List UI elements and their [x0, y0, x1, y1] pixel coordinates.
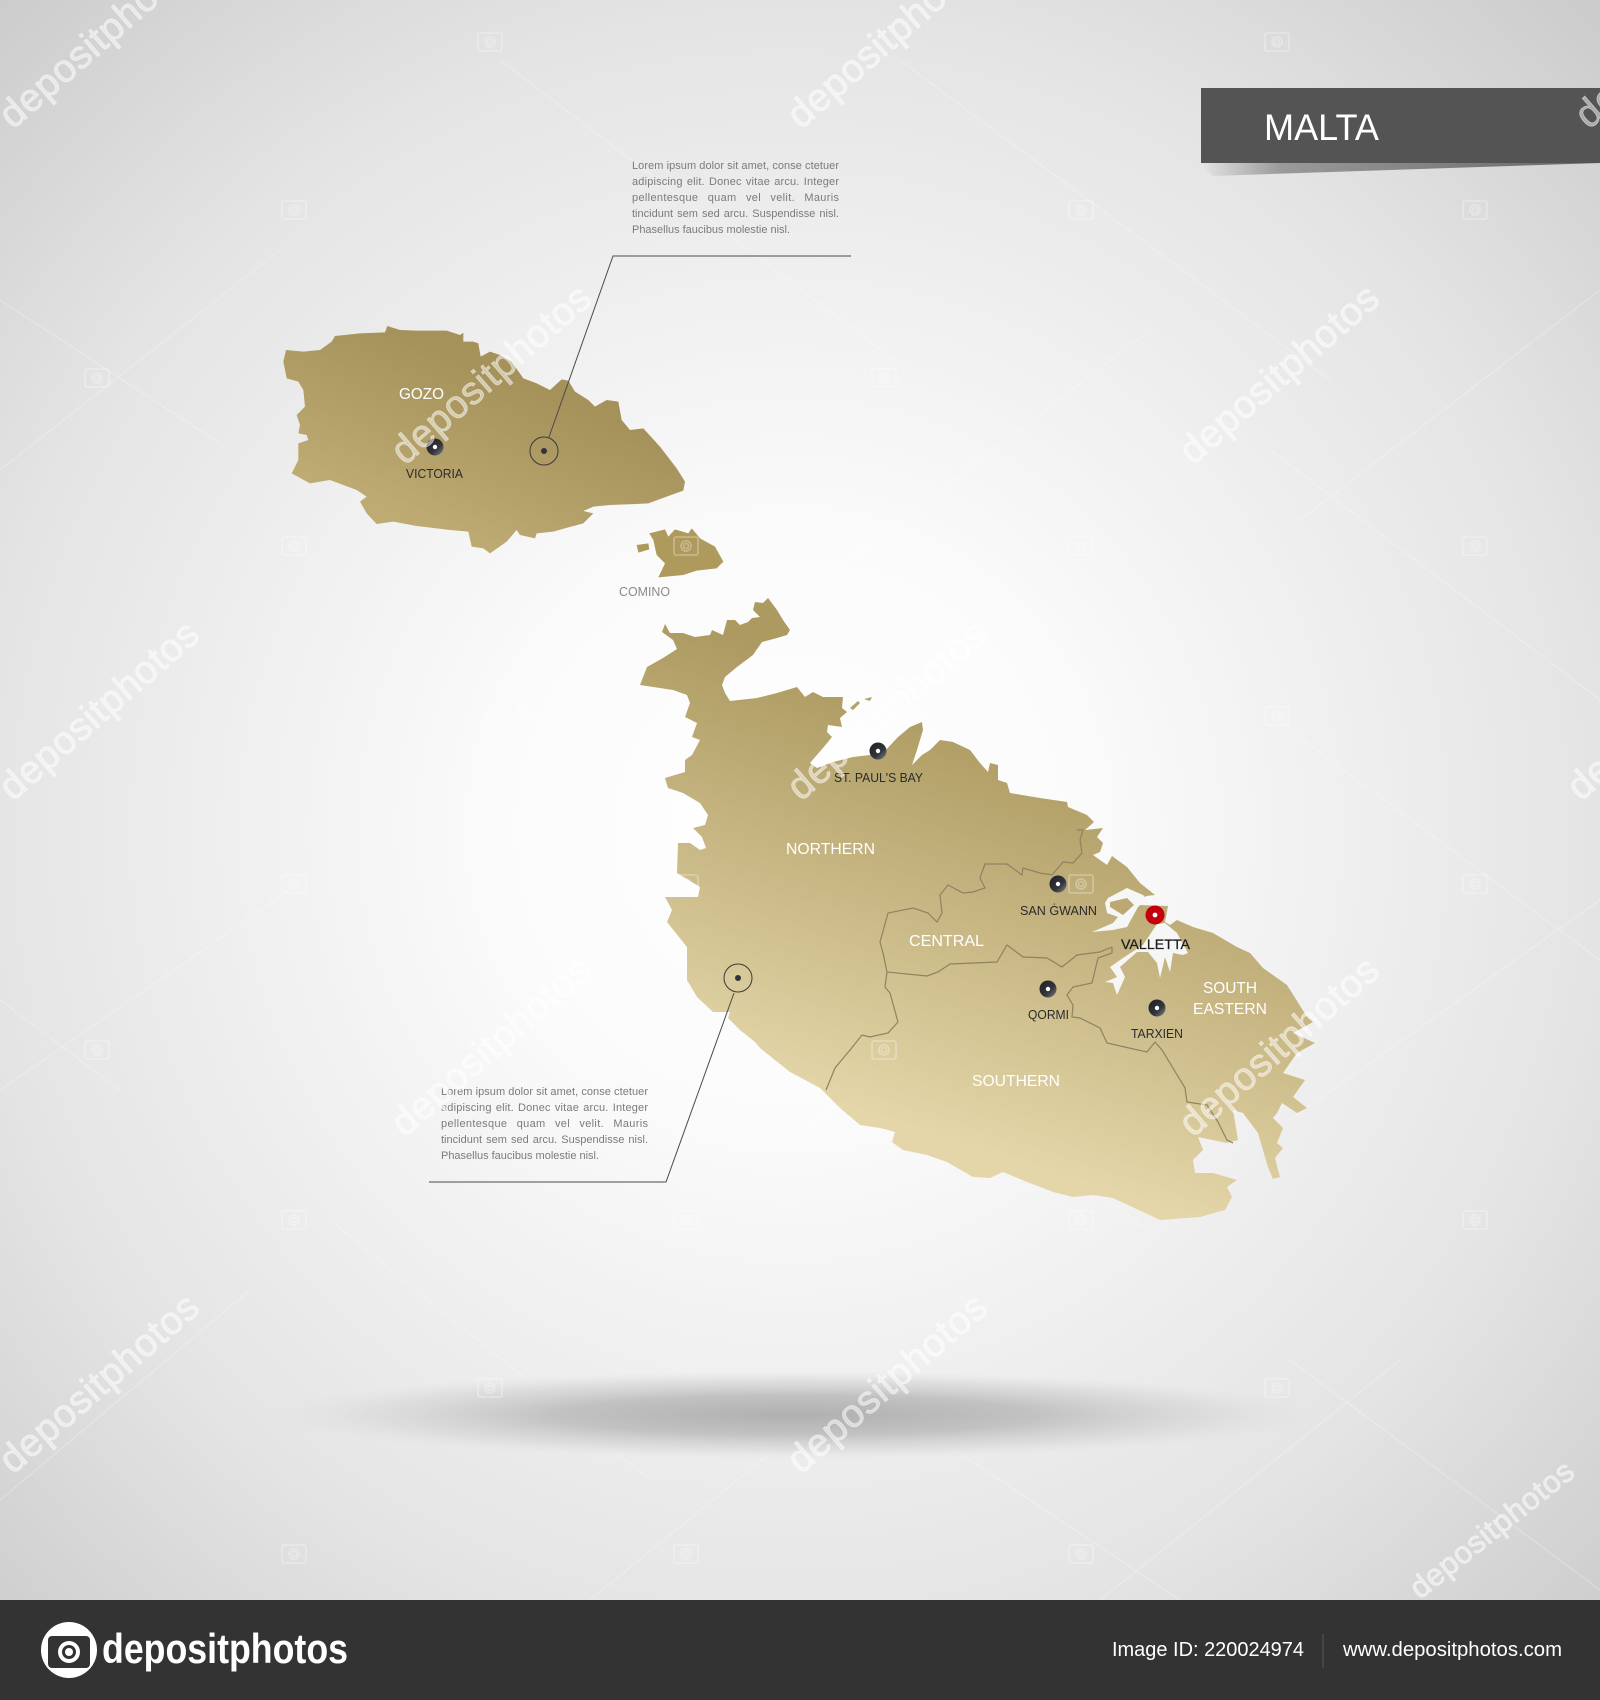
marker: St. Paul's Bay [870, 742, 886, 760]
city labels: ST. PAUL'S BAY [834, 771, 924, 785]
watermark: diagonal text: depositphotos [383, 948, 600, 1145]
region labels: NORTHERN [786, 841, 875, 858]
marker: Valletta capital [1146, 906, 1164, 924]
region labels: CENTRAL [909, 933, 984, 950]
Grand harbour [1105, 923, 1188, 995]
city labels [406, 467, 1190, 1041]
callout text: pellentesque quam vel velit. Mauris [441, 1118, 648, 1130]
region labels [399, 386, 1267, 1090]
city labels: VALLETTA [1121, 937, 1190, 952]
callout text: tincidunt sem sed arcu. Suspendisse nisl. [632, 208, 839, 220]
island outline [640, 598, 1315, 1220]
city labels: COMINO [619, 585, 670, 599]
footer logo icon [41, 1622, 97, 1678]
watermark: diagonal text: depositphotos [779, 612, 996, 809]
city labels: TARXIEN [1131, 1027, 1183, 1041]
watermark: diagonal text: depositphotos [1403, 1453, 1581, 1605]
city labels: SAN ĠWANN [1020, 904, 1097, 918]
callout text: tincidunt sem sed arcu. Suspendisse nisl. [441, 1134, 648, 1146]
region labels: SOUTHERN [972, 1073, 1060, 1090]
title banner [1201, 88, 1600, 176]
map of Malta main island [640, 598, 1315, 1220]
callout target ring [724, 964, 752, 992]
city markers [426, 438, 1166, 1016]
banner shadow [1201, 163, 1600, 176]
region labels: GOZO [399, 386, 444, 403]
ground shadow [260, 1371, 1330, 1459]
callout text: adipiscing elit. Donec vitae arcu. Integer [632, 176, 839, 188]
marker: Victoria [426, 438, 444, 456]
watermark: diagonal text: depositphotos [779, 1285, 996, 1482]
callout target ring [530, 437, 558, 465]
islets off St Paul's Bay [850, 697, 872, 710]
footer url: www.depositphotos.com [1342, 1639, 1562, 1661]
callout text: Lorem ipsum dolor sit amet, conse ctetuer [632, 160, 839, 172]
callout text: pellentesque quam vel velit. Mauris [632, 192, 840, 204]
watermark: diagonal text: depositphotos [383, 276, 600, 473]
Marsamxett harbour [1092, 888, 1147, 932]
watermark: diagonal text: depositphotos [1171, 948, 1388, 1145]
callout text [441, 1086, 648, 1162]
map of Gozo [283, 326, 685, 553]
watermark: diagonal text: depositphotos [1171, 276, 1388, 473]
callout leader line [429, 993, 734, 1182]
watermark: camera icons [85, 33, 1487, 1563]
callout: top [530, 160, 851, 465]
marker: Qormi [1040, 980, 1056, 998]
region borders [826, 830, 1233, 1143]
city labels: VICTORIA [406, 467, 464, 481]
callout text: adipiscing elit. Donec vitae arcu. Integer [441, 1102, 648, 1114]
banner bar [1201, 88, 1600, 163]
region labels: EASTERN [1193, 1001, 1267, 1018]
callout text [632, 160, 840, 236]
callout: bottom [429, 964, 752, 1182]
title: MALTA [1264, 107, 1379, 148]
footer bar [0, 1600, 1600, 1700]
map of Comino [637, 528, 723, 577]
marker: San Gwann [1050, 876, 1066, 892]
footer image id: Image ID: 220024974 [1112, 1639, 1304, 1661]
region labels: SOUTH [1203, 980, 1257, 997]
marker: Tarxien [1148, 1000, 1166, 1016]
callout leader line [549, 256, 851, 437]
callout text: Phasellus faucibus molestie nisl. [632, 224, 790, 236]
callout text: Phasellus faucibus molestie nisl. [441, 1150, 599, 1162]
footer logotype: depositphotos [102, 1625, 348, 1672]
footer divider [1322, 1634, 1324, 1668]
city labels: QORMI [1028, 1008, 1069, 1022]
Manoel island [1110, 898, 1134, 915]
callout text: Lorem ipsum dolor sit amet, conse ctetuer [441, 1086, 648, 1098]
